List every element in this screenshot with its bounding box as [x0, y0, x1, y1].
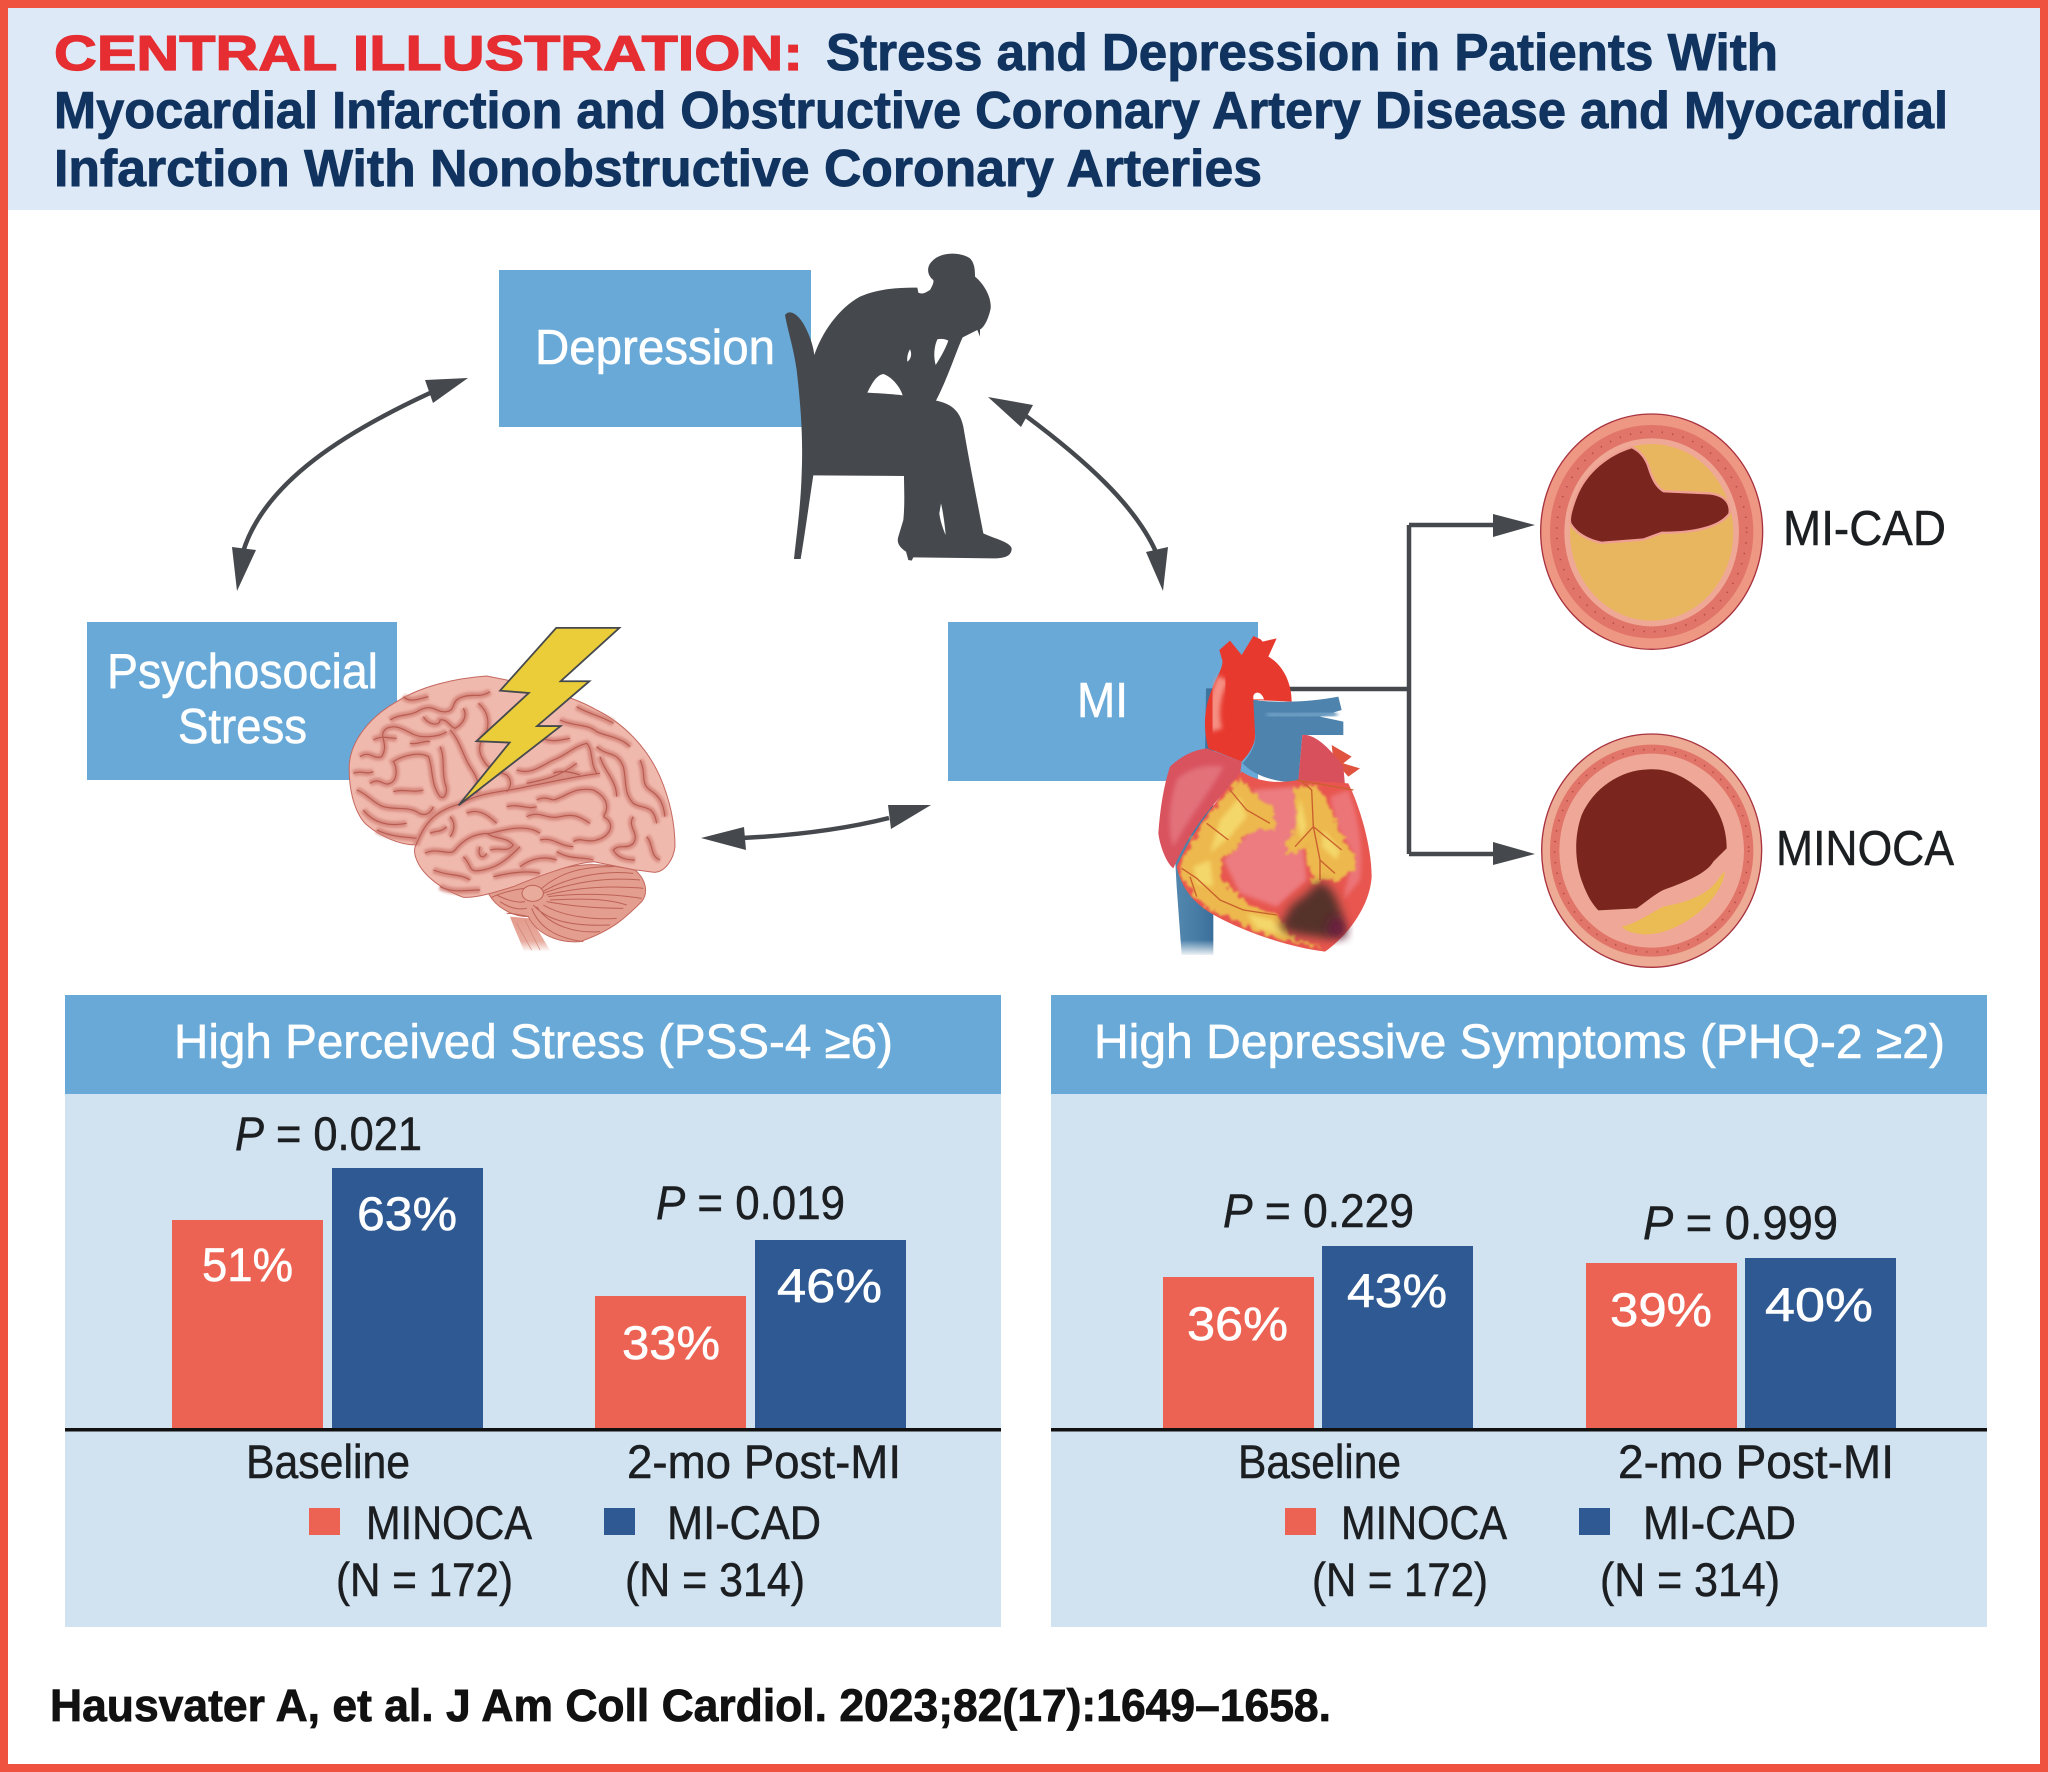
icon: heart [1158, 636, 1372, 957]
bar chart: depression baseline: P = 0.229 [1223, 1184, 1414, 1237]
bar chart: depression 2-month: 40% [1765, 1278, 1873, 1331]
heading: PSS-4: High Perceived Stress (PSS-4 ≥6) [174, 1016, 893, 1069]
bar chart: depression 2-month: P = 0.999 [1643, 1196, 1838, 1249]
title band: Stress and Depression in Patients With [826, 24, 1778, 82]
bar chart: depression baseline: 43% [1347, 1264, 1447, 1317]
legend: (N = 172) [336, 1553, 513, 1606]
axis labels: Baseline [246, 1435, 410, 1488]
bar chart: stress baseline: 51% [202, 1238, 293, 1291]
title band: CENTRAL ILLUSTRATION: [54, 27, 803, 81]
axis labels [1238, 1435, 1894, 1488]
title band: Infarction With Nonobstructive Coronary Arteries [54, 140, 1262, 198]
heading: PHQ-2: High Depressive Symptoms (PHQ-2 ≥2) [1094, 1016, 1945, 1069]
bar chart: stress 2-month: 33% [622, 1316, 720, 1369]
bar chart: stress baseline [172, 1107, 483, 1429]
bar chart: stress baseline: 63% [357, 1187, 457, 1240]
panel: high depressive symptoms [1051, 995, 1987, 1627]
legend: (N = 314) [625, 1553, 805, 1606]
icon: depressed person on chair [785, 254, 1012, 561]
bar chart: depression 2-month [1586, 1196, 1896, 1429]
arrow: brain to MI [701, 805, 931, 850]
icon: artery cross-section MINOCA [1542, 734, 1762, 967]
legend [309, 1496, 821, 1606]
title band [8, 8, 2040, 210]
icon: brain [349, 676, 675, 952]
connector: MI to artery types [1289, 514, 1535, 865]
panel: high perceived stress [65, 995, 1001, 1627]
box: MI [948, 622, 1258, 781]
bar chart: stress 2-month: P = 0.019 [656, 1176, 845, 1229]
axis labels [246, 1435, 901, 1488]
citation: Hausvater A, et al. J Am Coll Cardiol. 2023;82(17):1649–1658. [50, 1680, 1331, 1731]
title band: Myocardial Infarction and Obstructive Coronary Artery Disease and Myocardial [54, 82, 1948, 140]
legend: MINOCA [1341, 1496, 1508, 1549]
box: MI: MI [1077, 674, 1128, 728]
arrow: stress to depression [232, 378, 468, 591]
bar chart: depression 2-month: 39% [1610, 1283, 1712, 1336]
icon: artery cross-section MI-CAD [1541, 414, 1763, 649]
legend: MI-CAD [667, 1496, 821, 1549]
axis labels: 2-mo Post-MI [627, 1435, 901, 1488]
box: Psychosocial Stress: Stress [178, 700, 307, 754]
axis labels: 2-mo Post-MI [1618, 1435, 1894, 1488]
box: Psychosocial Stress: Psychosocial [107, 645, 378, 699]
label: MI-CAD: MI-CAD [1783, 502, 1946, 556]
icon: lightning bolt [459, 628, 619, 805]
bar chart: stress baseline: P = 0.021 [235, 1107, 422, 1160]
bar chart: stress 2-month: 46% [777, 1259, 882, 1312]
legend: (N = 314) [1600, 1553, 1780, 1606]
box: Depression [499, 270, 811, 427]
legend: MINOCA [366, 1496, 533, 1549]
legend: (N = 172) [1312, 1553, 1488, 1606]
bar chart: depression baseline: 36% [1187, 1297, 1288, 1350]
bar chart: stress 2-month [595, 1176, 906, 1429]
axis labels: Baseline [1238, 1435, 1401, 1488]
box: Depression: Depression [535, 321, 775, 375]
bar chart: depression baseline [1163, 1184, 1473, 1429]
legend [1285, 1496, 1796, 1606]
box: Psychosocial Stress [87, 622, 397, 780]
label: MINOCA: MINOCA [1776, 822, 1954, 876]
legend: MI-CAD [1643, 1496, 1796, 1549]
arrow: depression to MI [988, 397, 1168, 591]
